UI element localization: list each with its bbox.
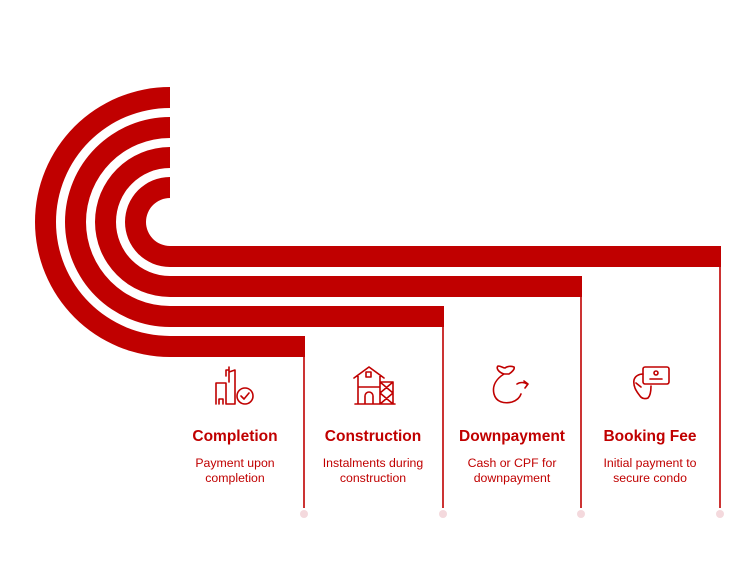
- text: Booking Fee: [603, 428, 696, 445]
- band: booking fee: [125, 177, 721, 267]
- text: completion: [205, 471, 265, 485]
- text: secure condo: [613, 471, 687, 485]
- text: Cash or CPF for: [468, 456, 556, 470]
- band: downpayment: [95, 147, 582, 297]
- text: Completion: [192, 428, 278, 445]
- icon: building with check: [216, 367, 253, 404]
- icon: house with scaffolding: [354, 367, 395, 404]
- text: Construction: [325, 428, 421, 445]
- text: downpayment: [474, 471, 550, 485]
- icon: money bag with arrow: [493, 366, 528, 403]
- text: Payment upon: [195, 456, 275, 470]
- column: booking fee: [603, 428, 696, 485]
- column: downpayment: [459, 428, 565, 485]
- text: Instalments during: [323, 456, 423, 470]
- column: construction: [323, 428, 423, 485]
- band: completion: [35, 87, 305, 357]
- text: Downpayment: [459, 428, 565, 445]
- column: completion: [192, 428, 278, 485]
- text: Initial payment to: [604, 456, 696, 470]
- icon: hand holding card: [634, 367, 669, 399]
- text: construction: [340, 471, 406, 485]
- band: construction: [65, 117, 444, 327]
